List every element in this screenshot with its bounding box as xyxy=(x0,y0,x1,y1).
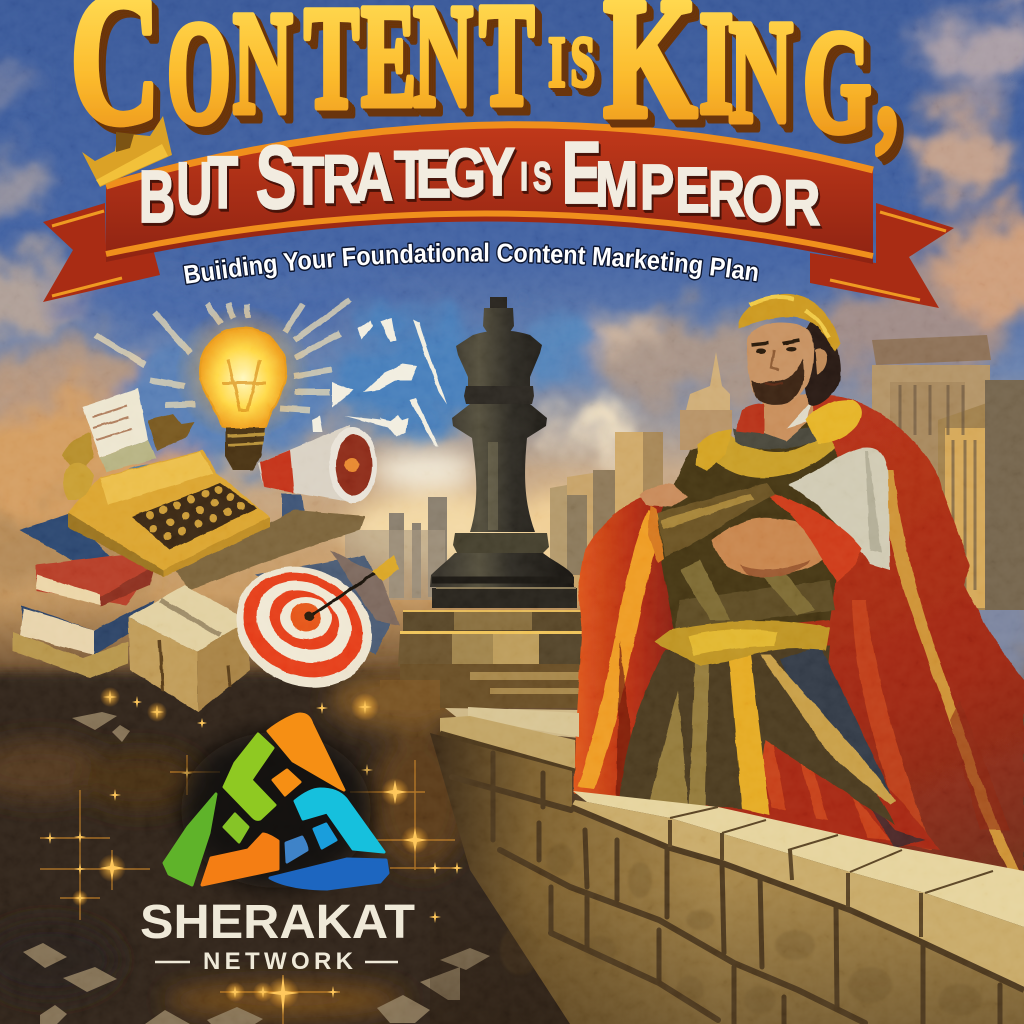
main title: IS xyxy=(548,22,595,102)
still life group xyxy=(13,300,447,712)
crown on letter C xyxy=(82,116,172,187)
main title xyxy=(70,0,898,164)
subtitle: Buiiding Your Foundational Content Marketing Plan xyxy=(182,241,759,286)
stone steps under chess piece xyxy=(380,610,590,738)
chess king piece xyxy=(430,297,577,608)
ribbon banner xyxy=(43,122,954,308)
white arrow marks xyxy=(312,318,447,446)
banner text: IS xyxy=(520,155,551,199)
banner text: MPEROR xyxy=(595,150,820,239)
megaphone xyxy=(258,425,377,526)
banner text: BUT xyxy=(139,143,238,238)
ground with glowing network xyxy=(0,670,590,1024)
red sleeve xyxy=(762,491,862,582)
sparkles xyxy=(44,687,463,1015)
paving stones xyxy=(23,712,490,1024)
left cape xyxy=(574,487,690,809)
target with arrow xyxy=(216,545,399,709)
stack of books xyxy=(13,514,156,678)
typewriter xyxy=(62,388,270,577)
right ribbon tail xyxy=(810,203,954,308)
neck and collar xyxy=(762,395,814,441)
logo mark xyxy=(164,714,388,889)
mortar joints xyxy=(452,753,1000,1024)
upper walkway behind the wall xyxy=(468,707,579,737)
banner text: E xyxy=(562,123,602,222)
banner lower edge xyxy=(106,213,873,256)
banner text xyxy=(139,123,820,239)
wall top coping stones xyxy=(571,791,1024,990)
light rays xyxy=(95,300,350,410)
gold belt xyxy=(655,621,830,666)
wall face xyxy=(430,733,1024,1024)
wordmark: SHERAKAT xyxy=(140,896,415,949)
hand xyxy=(640,484,688,507)
golden pauldrons xyxy=(806,400,861,444)
distant city skyline xyxy=(345,335,1024,610)
left ribbon tail xyxy=(43,203,160,302)
brick wall xyxy=(430,707,1024,1024)
plank and map behind target xyxy=(175,510,365,590)
banner text: TRATEGY xyxy=(292,134,515,218)
Sherakat Network logo xyxy=(140,714,415,975)
tunic and armour skirt xyxy=(620,645,895,825)
gold bracer forearm xyxy=(657,483,775,557)
gold collar xyxy=(700,430,835,478)
banner top edge xyxy=(106,125,873,186)
tagline: NETWORK xyxy=(203,948,354,975)
white shoulder drape xyxy=(788,447,890,570)
head xyxy=(738,294,840,406)
cardboard box xyxy=(128,585,250,712)
light bulb xyxy=(175,305,311,470)
horizon glow behind chess piece xyxy=(345,452,615,590)
cuirass xyxy=(655,420,850,635)
upper arm xyxy=(712,518,832,576)
banner body xyxy=(106,122,873,264)
lower robe red xyxy=(705,650,940,850)
back cape xyxy=(700,395,1024,880)
banner text: S xyxy=(256,127,296,228)
brick mottling xyxy=(500,844,982,1016)
emperor figure xyxy=(574,294,1024,880)
